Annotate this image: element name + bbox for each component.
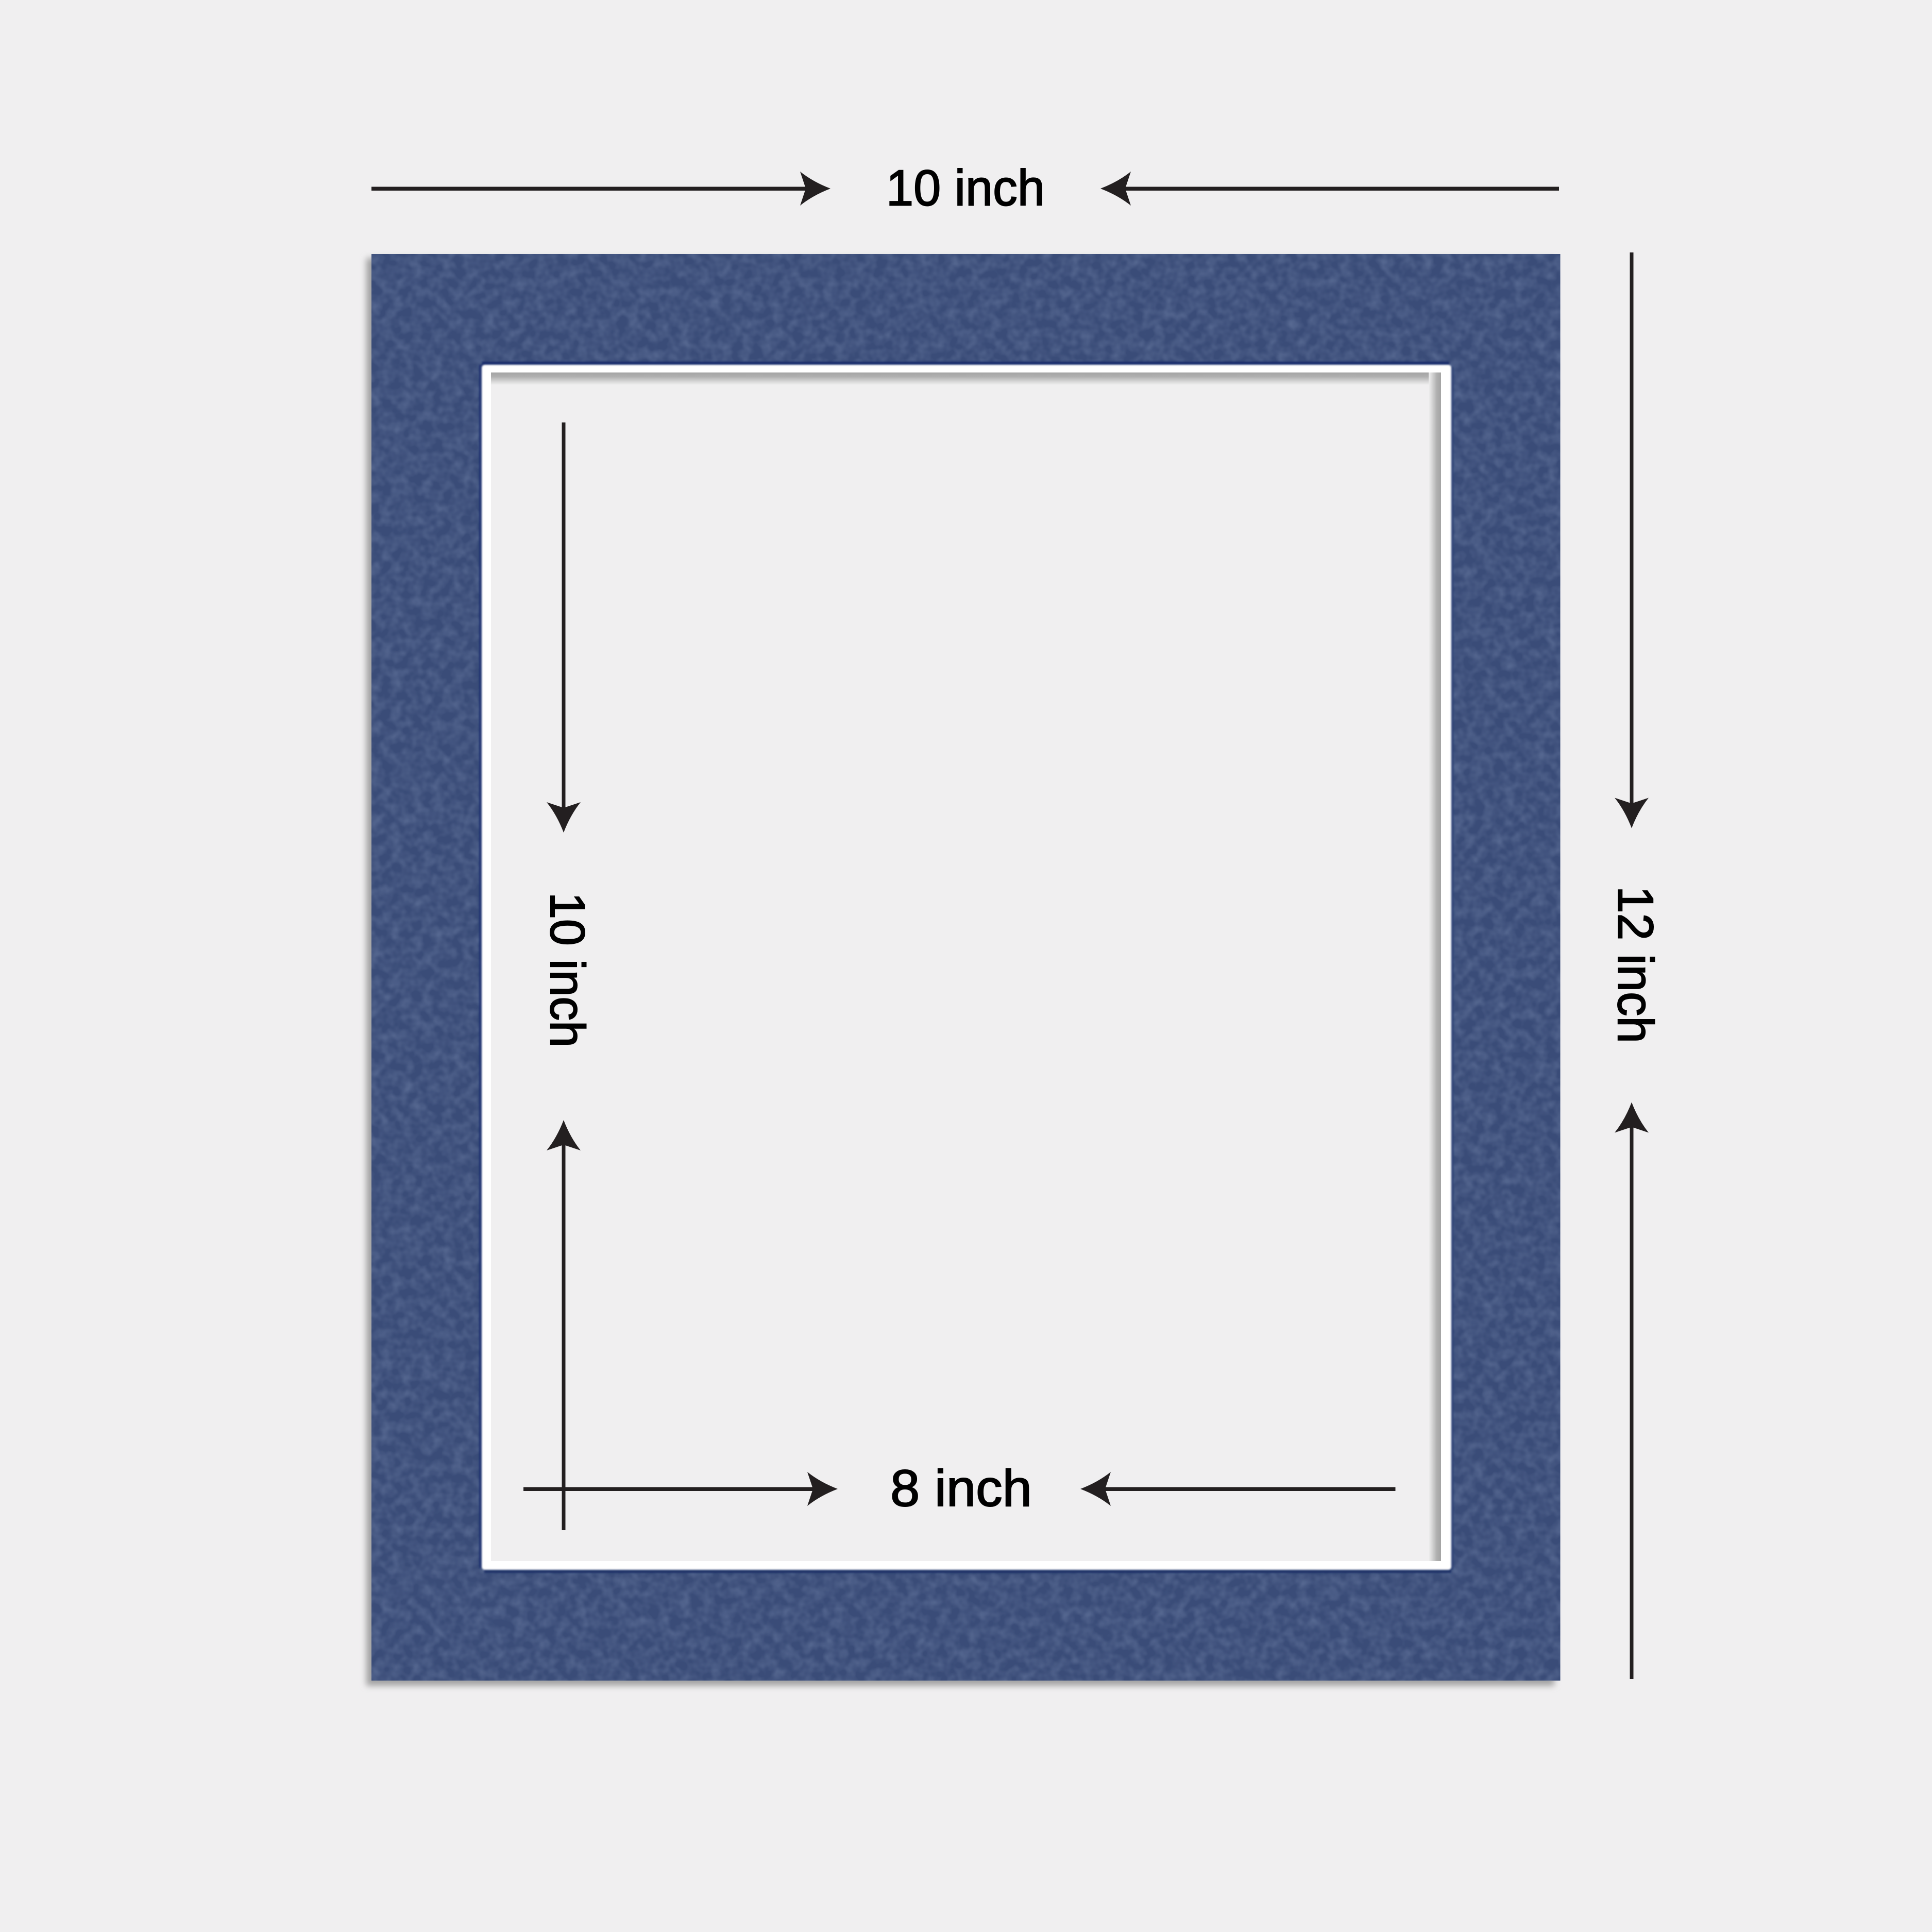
- arrow: right height bottom: [1615, 1103, 1649, 1679]
- arrow: inner height bottom: [547, 1120, 581, 1530]
- inner shadow top: [491, 372, 1441, 385]
- arrow: top width right: [1100, 172, 1559, 206]
- panel: mat board: [366, 254, 1560, 1686]
- white bevel: [482, 365, 1451, 1570]
- label: inner width: 8 inch: [890, 1460, 1032, 1517]
- inner opening: [491, 372, 1441, 1561]
- navy bevel edge: [479, 362, 1453, 1573]
- label: inner height: 10 inch: [540, 892, 595, 1047]
- panel: window opening: [479, 362, 1453, 1573]
- mat texture: [371, 254, 1560, 1681]
- arrow: inner width right: [1080, 1472, 1395, 1506]
- inner shadow right: [1429, 372, 1441, 1561]
- mat drop shadow: [366, 258, 1554, 1686]
- arrow: right height top: [1615, 252, 1649, 828]
- mat board surface: [371, 254, 1560, 1681]
- arrow: inner width left: [523, 1472, 838, 1506]
- label: outer height: 12 inch: [1607, 886, 1664, 1043]
- arrow: top width left: [371, 172, 831, 206]
- label: outer width: 10 inch: [886, 160, 1045, 216]
- arrow: inner height top: [547, 422, 581, 833]
